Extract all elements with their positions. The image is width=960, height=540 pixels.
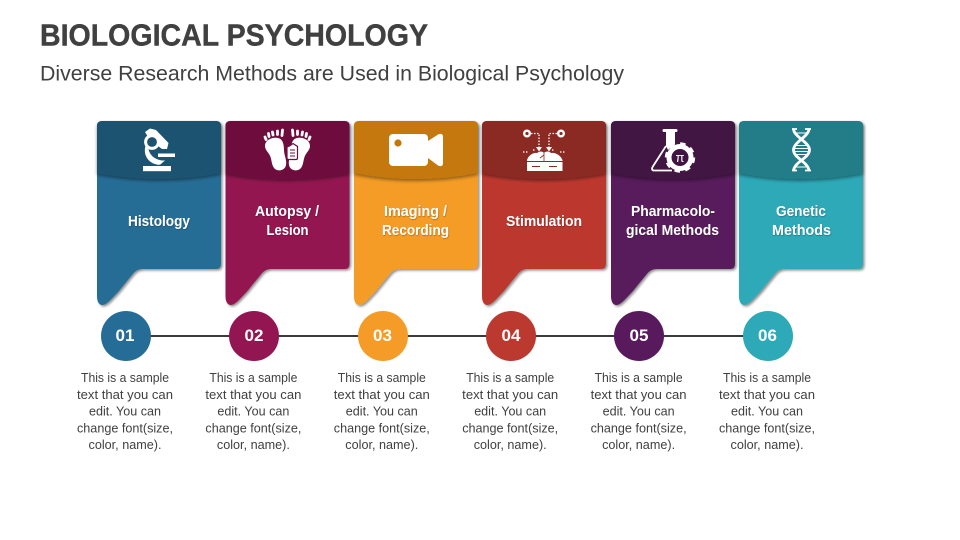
- text block 03: change font(size,: [334, 420, 430, 436]
- label: Pharmacological Methods: gical Methods: [626, 223, 719, 239]
- text block 03: text that you can: [334, 387, 430, 402]
- panel header: Autopsy / Lesion: [226, 121, 350, 179]
- label: Autopsy / Lesion: Autopsy /: [255, 204, 319, 220]
- step 05: 05: [630, 326, 648, 345]
- text block 05: This is a sample: [595, 370, 683, 385]
- text block 04: text that you can: [462, 387, 558, 402]
- panel: Histology: [97, 121, 221, 305]
- label: Imaging / Recording: Imaging /: [384, 204, 447, 220]
- text block 01: color, name).: [88, 437, 162, 452]
- text block 04: change font(size,: [462, 420, 558, 436]
- label: Pharmacological Methods: Pharmacolo-: [631, 204, 715, 220]
- icon: video camera: [389, 134, 443, 166]
- title: BIOLOGICAL PSYCHOLOGY: [40, 18, 428, 53]
- step 05: [614, 311, 664, 361]
- step 03: 03: [373, 326, 392, 345]
- text block 02: color, name).: [217, 437, 290, 452]
- text block 03: edit. You can: [346, 404, 418, 418]
- timeline connector line: [126, 335, 768, 337]
- panel header: Imaging / Recording: [354, 121, 478, 179]
- step 02: [229, 311, 279, 361]
- text block 06: change font(size,: [719, 420, 815, 436]
- text block 05: edit. You can: [603, 404, 675, 418]
- panel: Genetic Methods: [739, 121, 863, 305]
- text block 01: This is a sample: [81, 370, 169, 385]
- text block 02: text that you can: [205, 387, 301, 402]
- panel: Imaging / Recording: [354, 121, 478, 305]
- text block 05: change font(size,: [591, 420, 687, 436]
- panel header: Histology: [97, 121, 221, 179]
- label: Pharmacological Methods: [626, 204, 719, 239]
- text block 04: color, name).: [474, 437, 547, 452]
- text block 04: [462, 370, 558, 452]
- text block 02: [205, 370, 301, 452]
- panel: Pharmacological Methods: [611, 121, 735, 305]
- text block 03: [334, 370, 430, 452]
- text block 01: [77, 370, 173, 452]
- label: Genetic Methods: [772, 204, 831, 239]
- panel header: Pharmacological Methods: [611, 121, 735, 179]
- text block 05: [591, 370, 687, 452]
- text block 03: This is a sample: [338, 370, 426, 385]
- icon: DNA helix: [792, 129, 811, 171]
- label: Stimulation: Stimulation: [506, 214, 582, 230]
- text block 04: This is a sample: [466, 370, 554, 385]
- label: Histology: Histology: [128, 214, 190, 230]
- text block 01: edit. You can: [89, 404, 161, 418]
- step 04: 04: [502, 326, 521, 345]
- text block 02: change font(size,: [205, 420, 301, 436]
- panel: Autopsy / Lesion: [226, 121, 350, 305]
- panel header: Genetic Methods: [739, 121, 863, 179]
- step 04: [486, 311, 536, 361]
- panel: Stimulation: [482, 121, 606, 305]
- label: Genetic Methods: Genetic: [776, 204, 826, 220]
- text block 02: edit. You can: [217, 404, 289, 418]
- icon: brain stimulation: [523, 131, 565, 171]
- text block 06: This is a sample: [723, 370, 811, 385]
- text block 05: text that you can: [591, 387, 687, 402]
- step 06: 06: [758, 326, 777, 345]
- text block 05: color, name).: [602, 437, 675, 452]
- icon: flask with gear: π: [676, 150, 685, 165]
- step 01: 01: [116, 326, 134, 345]
- label: Imaging / Recording: Recording: [382, 223, 449, 239]
- label: Genetic Methods: Methods: [772, 223, 831, 239]
- icon: microscope: [143, 128, 175, 171]
- text block 01: text that you can: [77, 387, 173, 402]
- text block 06: [719, 370, 815, 452]
- subtitle: Diverse Research Methods are Used in Biological Psychology: [40, 63, 624, 86]
- text block 06: text that you can: [719, 387, 815, 402]
- text block 06: edit. You can: [731, 404, 803, 418]
- text block 01: change font(size,: [77, 420, 173, 436]
- icon: feet with toe tag: [265, 130, 310, 170]
- icon: flask with gear: [652, 130, 694, 172]
- text block 06: color, name).: [730, 437, 804, 452]
- text block 03: color, name).: [345, 437, 418, 452]
- text block 04: edit. You can: [474, 404, 546, 418]
- step 01: [101, 311, 151, 361]
- panel header: Stimulation: [482, 121, 606, 179]
- step 02: 02: [245, 326, 263, 345]
- step 06: [743, 311, 793, 361]
- label: Autopsy / Lesion: [255, 204, 319, 239]
- label: Imaging / Recording: [382, 204, 449, 239]
- label: Autopsy / Lesion: Lesion: [266, 223, 308, 239]
- step 03: [358, 311, 408, 361]
- text block 02: This is a sample: [209, 370, 297, 385]
